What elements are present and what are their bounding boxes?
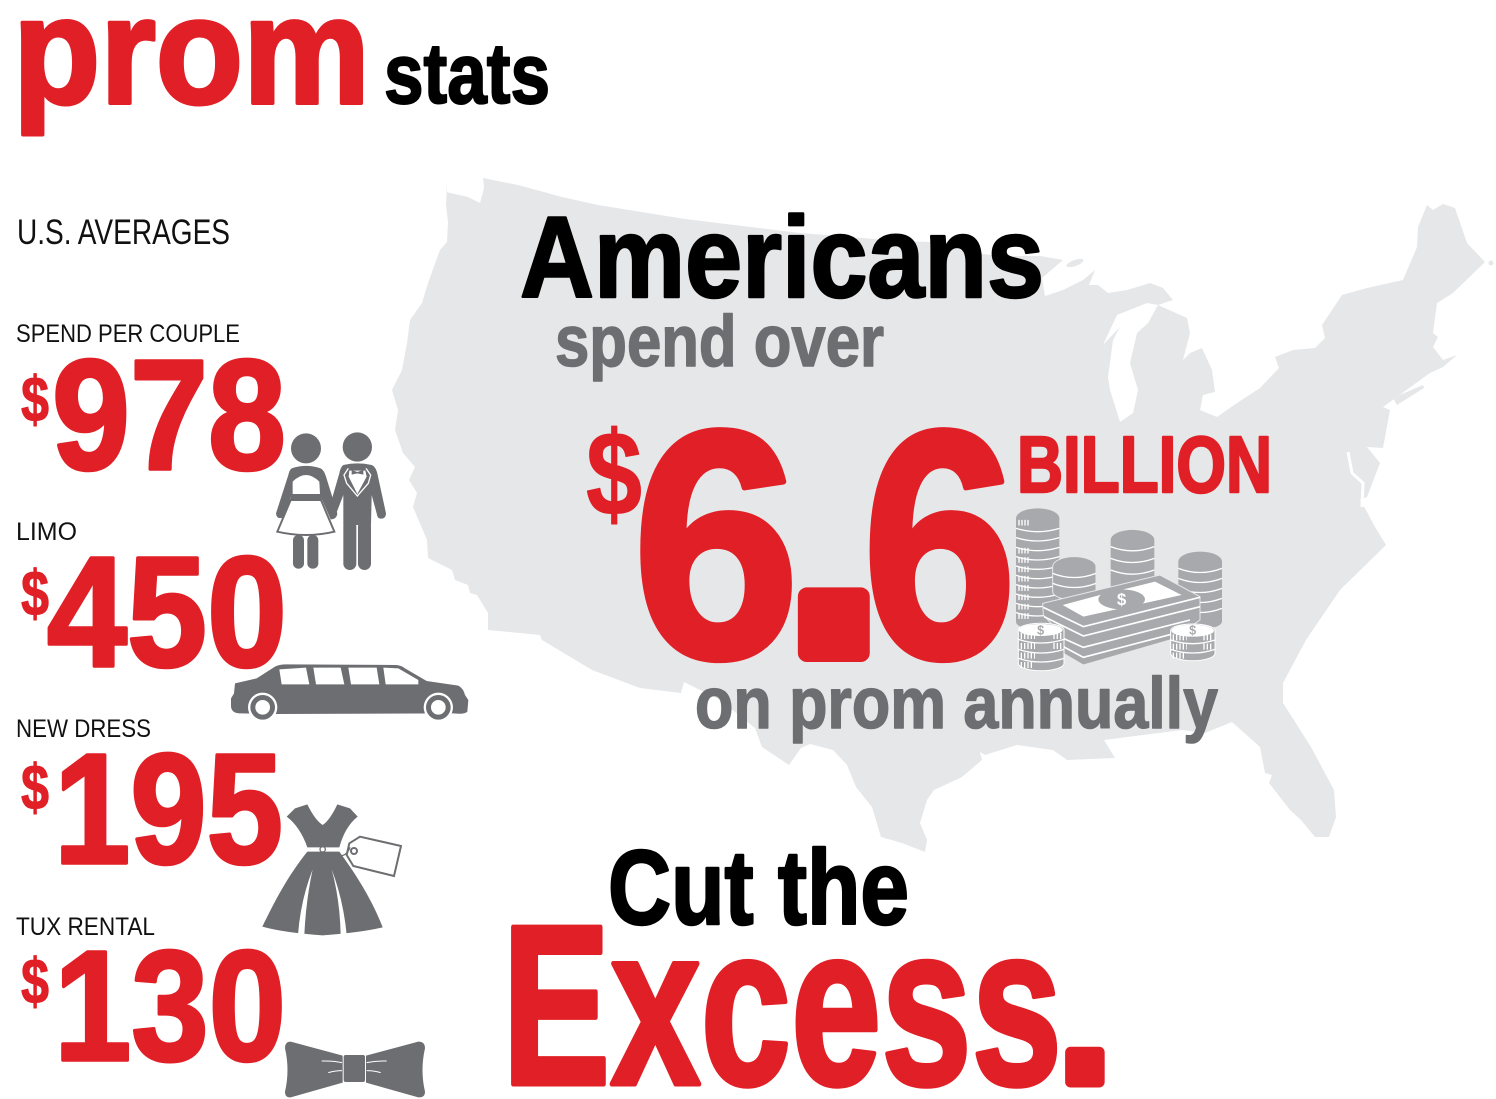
icon: couple: [276, 432, 386, 570]
stat: limo: LIMO: [16, 518, 77, 546]
icon: bow tie: [285, 1042, 425, 1097]
stat: limo: 450: [47, 525, 287, 700]
text: on prom annually: on prom annually: [695, 664, 1218, 744]
slogan: Cut the Excess: Cut the: [608, 829, 909, 947]
icon: limousine: [231, 664, 468, 722]
coin stack: small left: [1018, 623, 1064, 671]
slogan: Cut the Excess: [502, 829, 1113, 1099]
headline: Americans spend over: Americans: [520, 194, 1044, 322]
coin stack: tall left: [1016, 508, 1059, 630]
big number: $6.6 billion: 6: [862, 363, 1017, 726]
big number: $6.6 billion: $: [586, 407, 642, 541]
big number: $6.6 billion: 6: [632, 363, 800, 726]
cash stack: $: [1117, 590, 1127, 609]
big number: $6.6 billion: BILLION: [1017, 420, 1272, 509]
stat: new dress: NEW DRESS: [16, 715, 151, 743]
stat: new dress: 195: [54, 722, 283, 897]
coin stack: small left: $: [1037, 624, 1044, 638]
stat: limo: $: [21, 557, 49, 629]
title: stats: [384, 27, 550, 122]
heading: U.S. averages: U.S. AVERAGES: [17, 213, 230, 252]
stat: new dress: $: [21, 751, 49, 823]
stat: spend per couple: $: [21, 363, 49, 435]
big number: $6.6 billion: [586, 309, 1272, 734]
coin stack: short: [1053, 557, 1096, 600]
stat: tux rental: $: [21, 945, 49, 1017]
icon: coin stacks and cash: [1016, 508, 1222, 671]
cash stack: [1043, 575, 1200, 665]
coin stack: small right: $: [1189, 624, 1196, 638]
coin stack: centre: [1111, 530, 1154, 587]
coin stack: right: [1178, 552, 1222, 629]
stat: spend per couple: 978: [52, 328, 286, 503]
headline: Americans spend over: spend over: [555, 302, 884, 382]
big number: $6.6 billion: .: [781, 309, 887, 734]
icon: dress with price tag: [262, 804, 401, 935]
stat: spend per couple: SPEND PER COUPLE: [16, 320, 240, 348]
coin stack: small right: [1171, 624, 1215, 661]
stat: tux rental: TUX RENTAL: [16, 913, 155, 941]
headline: Americans spend over: [520, 194, 1044, 382]
stat: tux rental: 130: [54, 919, 286, 1094]
map: United States silhouette: [392, 178, 1494, 852]
